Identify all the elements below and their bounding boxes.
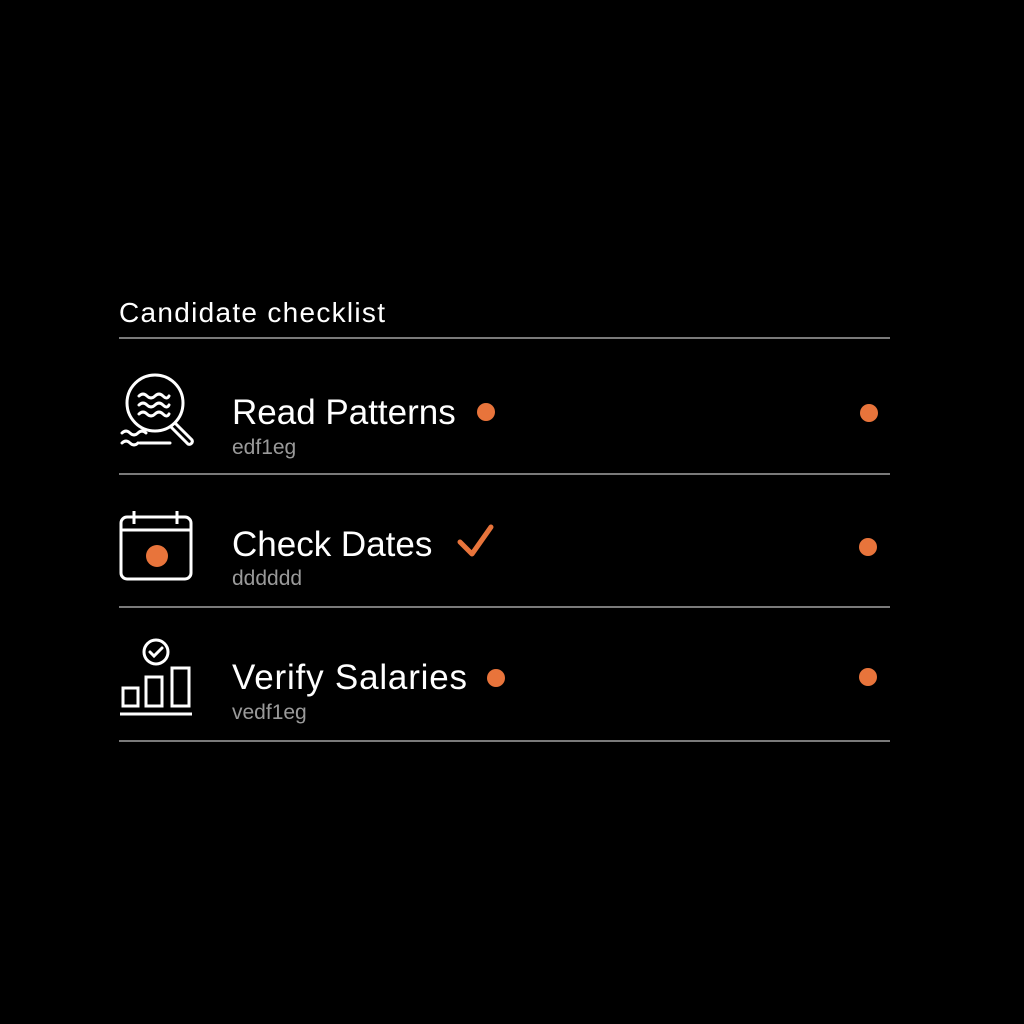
subtitle: edf1eg [232, 436, 296, 459]
right dot [859, 538, 877, 556]
right dot [860, 404, 878, 422]
status dot [477, 403, 495, 421]
icon: calendar [121, 511, 191, 579]
heading: Read Patterns [232, 393, 456, 432]
check mark [460, 527, 491, 554]
title: Candidate checklist [119, 297, 385, 328]
subtitle: vedf1eg [232, 701, 307, 724]
heading: Check Dates [232, 525, 432, 564]
status dot [487, 669, 505, 687]
subtitle: dddddd [232, 567, 302, 590]
icon: bar chart with check [120, 640, 192, 714]
heading: Verify Salaries [232, 658, 467, 697]
icon: magnifier with waves [122, 375, 192, 445]
row: Verify Salaries [120, 640, 877, 724]
row: Check Dates [121, 511, 877, 590]
row: Read Patterns [122, 375, 878, 459]
right dot [859, 668, 877, 686]
